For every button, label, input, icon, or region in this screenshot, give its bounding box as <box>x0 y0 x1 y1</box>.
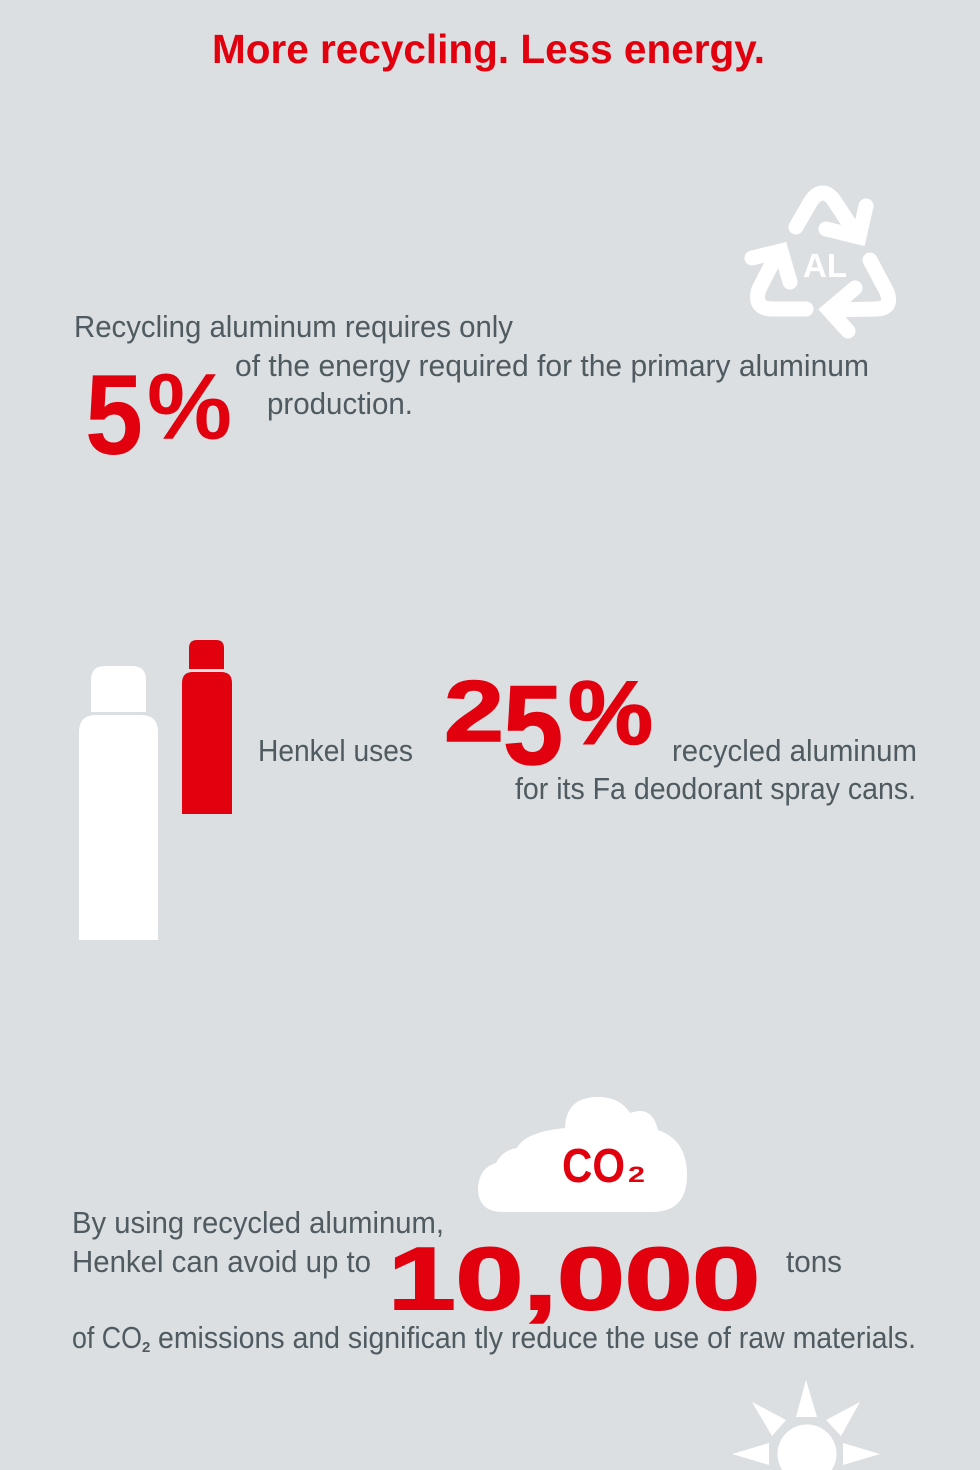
icon: CO2 cloud: CO <box>562 1140 625 1193</box>
icon: CO2 cloud: 2 <box>628 1162 645 1187</box>
stat: 5% <box>85 352 232 479</box>
stat: 10,000: 10,000 <box>388 1229 760 1328</box>
text block: recycling energy <box>74 309 869 421</box>
text block: recycling energy: production. <box>267 386 413 421</box>
icon: red small spray can <box>182 640 232 814</box>
icon: aluminum recycling symbol <box>752 193 889 331</box>
stat: 25% <box>444 663 653 788</box>
text block: recycling energy: of the energy required for the primary aluminum <box>235 348 869 383</box>
stat: 5%: % <box>147 354 232 459</box>
text block: avoid emissions intro <box>72 1205 444 1279</box>
text block: recycled aluminum <box>515 733 917 806</box>
text block: recycled aluminum: recycled aluminum <box>672 733 917 768</box>
icon: sun <box>732 1380 880 1470</box>
icon: CO2 cloud <box>478 1097 687 1212</box>
text block: avoid emissions intro: Henkel can avoid up to <box>72 1244 371 1279</box>
text block: avoid emissions intro: By using recycled aluminum, <box>72 1205 444 1240</box>
title: More recycling. Less energy. <box>212 26 765 72</box>
stat: 25%: 2 <box>444 664 504 760</box>
text block: Henkel uses: Henkel uses <box>258 733 413 768</box>
text block: recycling energy: Recycling aluminum requires only <box>74 309 513 344</box>
stat: 25%: 5 <box>503 663 563 788</box>
text block: emissions and raw materials: emissions and significan tly reduce the use of raw materials. <box>158 1320 916 1355</box>
stat: 25%: % <box>568 664 653 764</box>
text block: recycled aluminum: for its Fa deodorant spray cans. <box>515 771 916 806</box>
icon: white large spray can <box>79 666 158 940</box>
text block: tons: tons <box>786 1244 842 1279</box>
icon: aluminum recycling symbol: AL <box>803 247 847 284</box>
text block: emissions and raw materials: 2 <box>142 1339 150 1356</box>
text block: emissions and raw materials: of CO <box>72 1320 142 1355</box>
stat: 5%: 5 <box>85 352 143 479</box>
